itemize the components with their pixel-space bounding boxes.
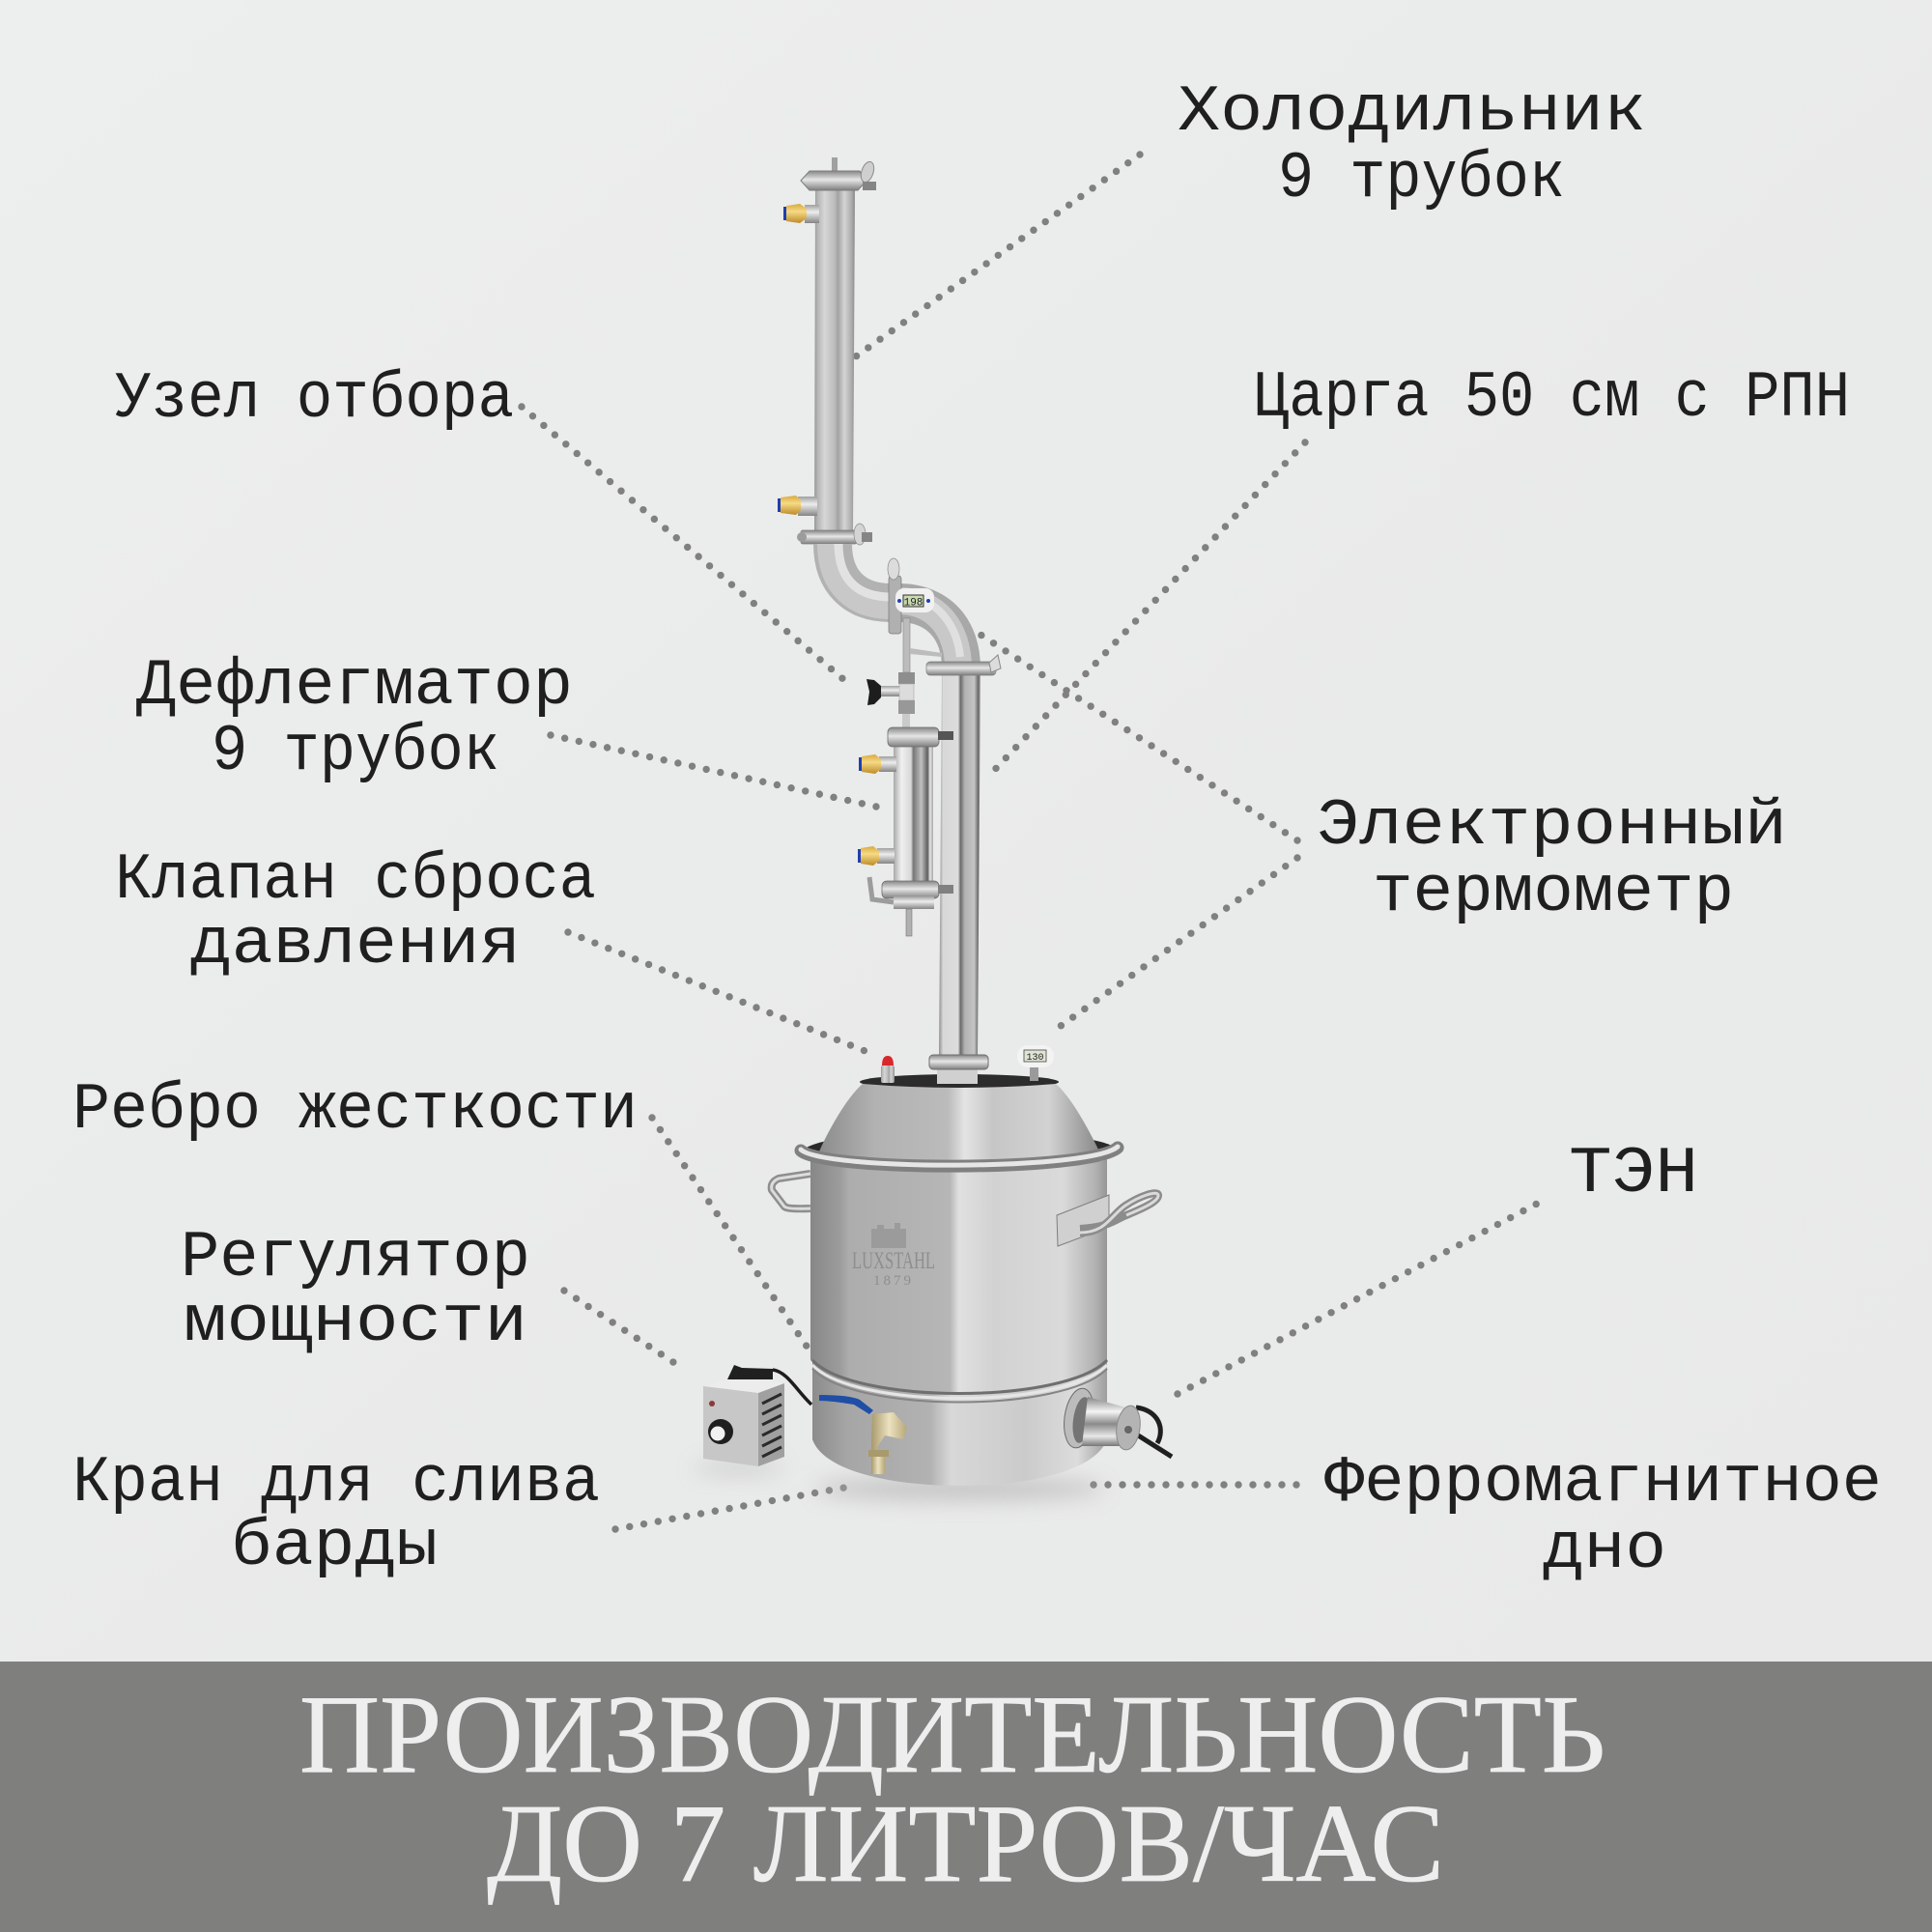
label: Кран для слива барды: барды <box>231 1510 438 1584</box>
bottom banner <box>0 1662 1932 1932</box>
black knob <box>867 679 881 705</box>
label: Регулятор мощности: Регулятор <box>181 1221 530 1295</box>
label: Регулятор мощности: мощности <box>184 1286 527 1360</box>
top column clamp <box>926 655 1001 675</box>
cooler column <box>778 157 876 545</box>
logo year: 1879 <box>873 1273 914 1289</box>
label: ТЭН: ТЭН <box>1569 1137 1698 1211</box>
upper dephlegmator fitting <box>859 754 896 774</box>
leader: Узел отбора <box>522 407 850 685</box>
logo castle <box>871 1223 906 1248</box>
boiler <box>772 1045 1172 1486</box>
regulator side vents <box>758 1383 784 1466</box>
label: Дефлегматор 9 трубок: Дефлегматор <box>136 649 573 724</box>
top pin <box>832 157 838 172</box>
distillation apparatus <box>693 157 1172 1500</box>
dephlegmator body <box>894 744 933 884</box>
power regulator <box>703 1365 811 1466</box>
cooler tube <box>814 185 855 532</box>
leader: термометр нижний <box>1061 858 1297 1026</box>
leader: Ребро <box>652 1118 808 1348</box>
brass drain tap <box>868 1412 907 1474</box>
bottom drain pipe <box>906 909 912 936</box>
stiffening rib <box>812 1360 1107 1403</box>
leader: ТЭН <box>1178 1203 1539 1394</box>
label: Дефлегматор 9 трубок: 9 трубок <box>212 715 499 789</box>
heating element cable <box>1132 1407 1172 1457</box>
label: Электронный термометр: Электронный <box>1317 789 1787 864</box>
right handle <box>1080 1193 1158 1233</box>
thermometer on elbow <box>895 588 934 612</box>
label: Клапан сброса давления: Клапан сброса <box>115 843 596 918</box>
label: Узел отбора: Узел отбора <box>115 362 514 437</box>
leader: Царга <box>986 442 1305 779</box>
bottom dephlegmator clamp <box>882 881 953 909</box>
leader: Регулятор <box>564 1291 685 1370</box>
ball valve blue handle <box>819 1395 873 1414</box>
regulator top <box>703 1378 784 1393</box>
regulator led <box>709 1401 715 1406</box>
leader: термометр верхний <box>980 635 1297 840</box>
thermometer on elbow: 198 <box>904 597 923 609</box>
leader: Холодильник <box>856 155 1140 356</box>
rectification column <box>926 655 1001 1058</box>
lid thermometer: 130 <box>1026 1053 1044 1064</box>
side bent tube <box>869 877 894 902</box>
top rolled rim <box>801 1147 1118 1166</box>
banner background <box>0 1662 1932 1932</box>
column tube <box>939 671 980 1058</box>
lower elbow <box>898 595 961 668</box>
pressure relief valve <box>881 1056 895 1083</box>
top clamp wing <box>859 160 876 190</box>
lower cooler clamp <box>797 524 872 545</box>
strut <box>910 648 942 657</box>
take-off pipe <box>903 618 910 672</box>
bottom column clamp <box>929 1055 988 1069</box>
upper coolant fitting <box>783 204 819 223</box>
regulator knob <box>708 1419 733 1444</box>
top flange <box>801 171 867 190</box>
lower boiler section <box>812 1352 1107 1486</box>
label: Электронный термометр: термометр <box>1373 856 1734 930</box>
floor shadow <box>693 1463 1104 1500</box>
label: Холодильник 9 трубок: 9 трубок <box>1278 142 1565 216</box>
dephlegmator <box>858 727 953 936</box>
leader: Кран <box>615 1488 844 1529</box>
boiler back rim <box>804 1131 1115 1153</box>
lower dephlegmator fitting <box>858 846 895 866</box>
callout labels <box>72 75 1882 1587</box>
banner headline: ПРОИЗВОДИТЕЛЬНОСТЬ <box>299 1673 1605 1797</box>
logo wordmark: LUXSTAHL <box>852 1248 935 1274</box>
heating element <box>1061 1386 1143 1451</box>
lid thermometer <box>1017 1045 1054 1081</box>
upper elbow <box>830 544 891 607</box>
leader lines <box>522 155 1539 1529</box>
leader: Дно <box>1094 1481 1297 1489</box>
label: Холодильник 9 трубок: Холодильник <box>1178 75 1646 150</box>
take-off unit <box>867 618 942 729</box>
left handle <box>772 1174 810 1208</box>
regulator plug <box>727 1365 773 1379</box>
label: Ферромагнитное дно: дно <box>1543 1513 1666 1587</box>
column neck <box>937 1067 978 1084</box>
label: Царга 50 см с РПН: Царга 50 см с РПН <box>1254 361 1850 436</box>
label: Клапан сброса давления: давления <box>190 908 521 982</box>
label: Ферромагнитное дно: Ферромагнитное <box>1324 1446 1882 1520</box>
label: Кран для слива барды: Кран для слива <box>72 1446 600 1520</box>
lower coolant fitting <box>778 496 817 516</box>
lid top dark rim <box>860 1074 1059 1090</box>
regulator cord <box>773 1370 811 1405</box>
engraved logo <box>852 1223 935 1289</box>
banner headline: ДО 7 ЛИТРОВ/ЧАС <box>487 1782 1444 1906</box>
right handle plate <box>1057 1195 1109 1246</box>
cone lid <box>819 1084 1099 1164</box>
leader: Клапан <box>568 932 877 1056</box>
leader: Дефлегматор <box>551 735 876 807</box>
main pot body <box>810 1159 1107 1392</box>
regulator front face <box>703 1386 758 1466</box>
connecting elbows <box>830 544 961 668</box>
valve body <box>881 672 915 729</box>
elbow flange <box>888 558 901 634</box>
top dephlegmator clamp <box>888 727 953 747</box>
label: Ребро жесткости: Ребро жесткости <box>72 1073 638 1148</box>
